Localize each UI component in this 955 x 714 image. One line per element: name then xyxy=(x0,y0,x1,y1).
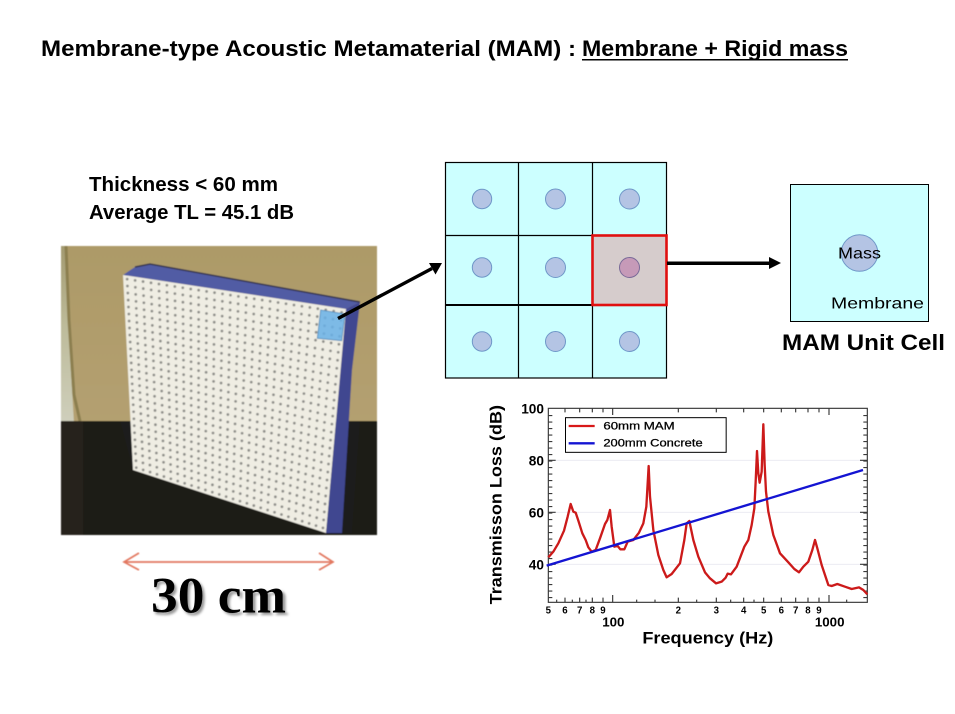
x axis numbers: 9 xyxy=(816,606,822,617)
grid lines xyxy=(548,460,867,564)
y axis numbers: 40 xyxy=(529,557,544,572)
size scale: 30 cm: 30 cm xyxy=(151,568,286,624)
arrow: panel to grid xyxy=(338,263,442,318)
x axis numbers: 1000 xyxy=(815,615,844,630)
heading: MAM Unit Cell: MAM Unit Cell xyxy=(782,330,945,355)
title: Membrane + Rigid mass xyxy=(582,36,848,61)
x axis numbers: 5 xyxy=(761,606,767,617)
x axis numbers: 2 xyxy=(676,606,681,617)
legend xyxy=(565,418,726,452)
perforation dots xyxy=(123,278,346,529)
x axis numbers: 9 xyxy=(600,606,606,617)
title: Membrane-type Acoustic Metamaterial (MAM) : xyxy=(41,36,576,61)
legend: 200mm Concrete xyxy=(603,438,703,450)
x axis numbers: 7 xyxy=(793,606,798,617)
MAM unit cell diagram: Membrane xyxy=(831,296,924,312)
x axis numbers: 100 xyxy=(602,615,624,630)
y axis numbers: 80 xyxy=(529,453,544,468)
x axis numbers: 6 xyxy=(562,606,568,617)
x axis numbers: 8 xyxy=(590,606,596,617)
panel face xyxy=(123,275,346,533)
x axis numbers: 6 xyxy=(779,606,785,617)
y axis numbers xyxy=(521,401,544,572)
title xyxy=(41,36,848,61)
plot frame and ticks xyxy=(548,408,867,602)
highlighted cell xyxy=(317,310,345,341)
size scale: 30 cm: 30 cm xyxy=(153,571,289,627)
x axis numbers: 5 xyxy=(546,606,552,617)
panel top edge xyxy=(123,264,360,309)
photo of MAM panel xyxy=(61,246,377,535)
axis titles: Frequency (Hz) xyxy=(642,629,773,648)
highlighted cell xyxy=(592,236,666,305)
y axis numbers: 60 xyxy=(529,505,544,520)
3x3 unit cell grid xyxy=(446,162,666,378)
legend: 60mm MAM xyxy=(603,420,675,432)
y axis numbers: 100 xyxy=(521,401,544,416)
red curve: 60mm MAM xyxy=(548,424,867,594)
transmission loss chart xyxy=(486,401,867,648)
x axis numbers: 8 xyxy=(805,606,811,617)
text block: specs: Thickness < 60 mm xyxy=(89,174,278,196)
x axis numbers: 3 xyxy=(714,606,720,617)
x axis numbers: 4 xyxy=(741,606,747,617)
blue line: 200mm concrete xyxy=(547,470,863,566)
text block: specs xyxy=(89,174,294,224)
x axis numbers xyxy=(546,606,844,630)
panel right side xyxy=(326,302,360,533)
text block: specs: Average TL = 45.1 dB xyxy=(89,202,294,224)
arrow: selected cell to unit cell xyxy=(667,257,781,269)
transmission loss chart: Transmisson Loss (dB) xyxy=(486,405,505,604)
MAM unit cell diagram xyxy=(790,184,928,322)
x axis numbers: 7 xyxy=(577,606,582,617)
MAM unit cell diagram: Mass xyxy=(838,246,881,262)
size scale: 30 cm xyxy=(124,553,333,627)
